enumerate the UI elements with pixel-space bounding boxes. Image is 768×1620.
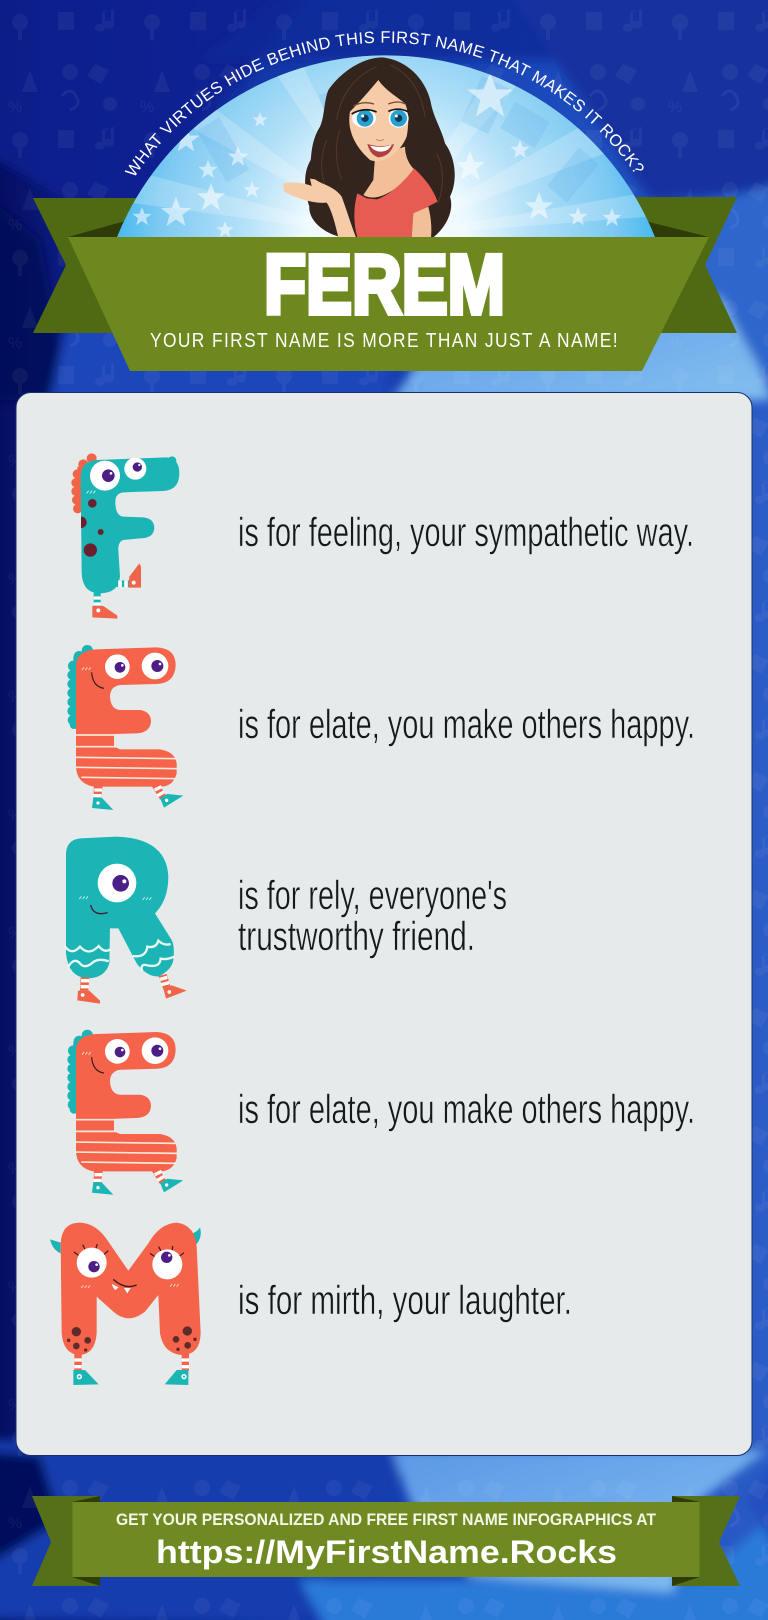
text: M line: is for mirth, your laughter.	[238, 1277, 572, 1323]
header ribbon	[68, 237, 709, 371]
monster letter F	[71, 453, 179, 619]
footer url: https://MyFirstName.Rocks	[156, 1534, 617, 1570]
woman character	[283, 57, 455, 237]
monster letter R	[65, 837, 187, 1004]
name title: FEREM	[264, 238, 505, 332]
footer ribbon	[32, 1496, 740, 1586]
main panel	[16, 392, 752, 1456]
monster letter M	[50, 1223, 201, 1385]
text: R line	[238, 872, 507, 959]
footer prompt: GET YOUR PERSONALIZED AND FREE FIRST NAME INFOGRAPHICS AT	[116, 1510, 657, 1529]
monster letter E	[67, 645, 183, 810]
sky dome with stars	[117, 55, 655, 237]
text: R line: is for rely, everyone's	[238, 872, 507, 918]
curved tagline: WHAT VIRTUES HIDE BEHIND THIS FIRST NAME THAT MAKES IT ROCK?	[124, 31, 644, 200]
monster letter E	[67, 1030, 183, 1195]
header ribbon tails	[33, 197, 737, 333]
text: R line: trustworthy friend.	[238, 913, 475, 959]
header subtitle: YOUR FIRST NAME IS MORE THAN JUST A NAME!	[150, 330, 619, 352]
